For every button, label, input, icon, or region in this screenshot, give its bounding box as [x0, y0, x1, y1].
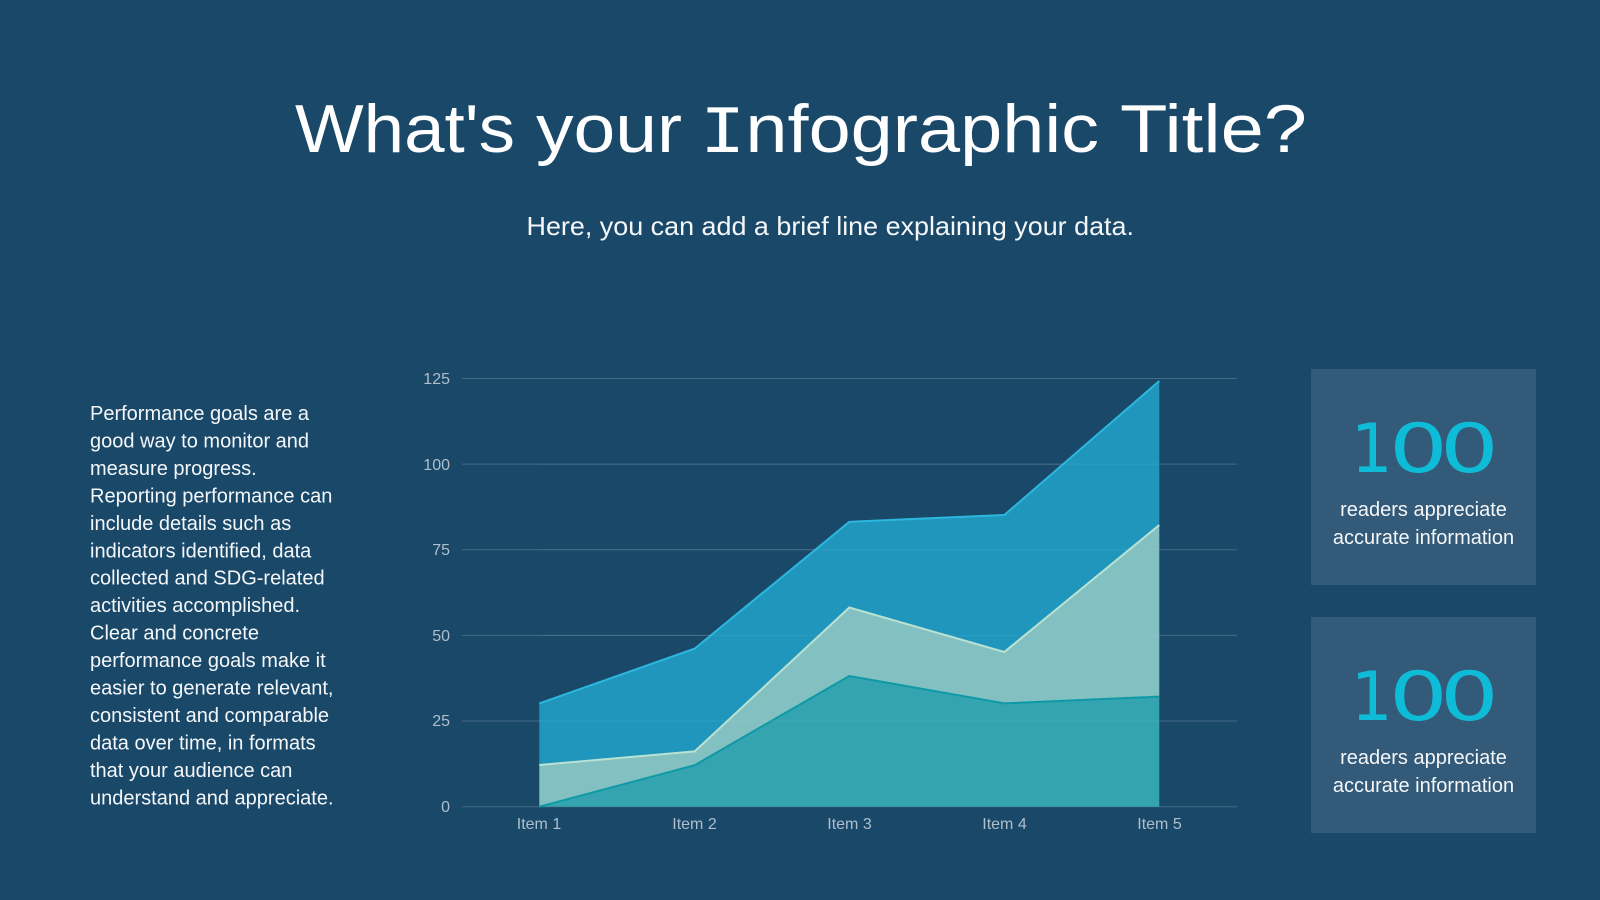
series: top band [539, 381, 1159, 765]
stat caption 1 [1333, 499, 1514, 549]
stat card 2 [1311, 617, 1536, 833]
stat number 2: 0 [1440, 658, 1499, 736]
text block: performance goals: Performance goals are a [90, 403, 310, 425]
title: your [536, 91, 682, 167]
stat caption 2: readers appreciate [1340, 747, 1507, 769]
text block: performance goals: easier to generate relevant, [90, 678, 334, 700]
y axis labels: 75 [432, 542, 450, 559]
y axis labels [423, 371, 450, 816]
y axis labels: 25 [432, 713, 450, 730]
series: middle band [539, 525, 1159, 807]
text block: performance goals: data over time, in formats [90, 732, 316, 754]
stat card 1 [1311, 369, 1536, 585]
x axis labels: Item 4 [982, 816, 1027, 833]
x axis labels [517, 816, 1182, 833]
text block: performance goals: understand and appreciate. [90, 787, 334, 809]
title: Infographic [700, 91, 1099, 173]
text block: performance goals: include details such as [90, 513, 291, 535]
y axis labels: 100 [423, 457, 450, 474]
title: What's [295, 91, 515, 167]
area chart [423, 371, 1237, 833]
x axis labels: Item 1 [517, 816, 561, 833]
stat caption 2 [1333, 747, 1514, 797]
text block: performance goals: indicators identified, data [90, 540, 312, 562]
x axis labels: Item 2 [672, 816, 717, 833]
stat caption 1: readers appreciate [1340, 499, 1507, 521]
stat caption 1: accurate information [1333, 527, 1514, 549]
y axis labels: 50 [432, 628, 450, 645]
stat caption 2: accurate information [1333, 775, 1514, 797]
text block: performance goals: performance goals make it [90, 650, 326, 672]
text block: performance goals: Reporting performance can [90, 485, 332, 507]
title: Title? [1120, 91, 1307, 167]
stat number 2 [1351, 658, 1499, 736]
stat number 1: 0 [1440, 410, 1499, 488]
stat number 2: 1 [1351, 658, 1393, 736]
subtitle: Here, you can add a brief line explaining your data. [526, 211, 1134, 241]
text block: performance goals: Clear and concrete [90, 623, 259, 645]
series: bottom band [539, 676, 1159, 807]
y axis labels: 0 [441, 799, 450, 816]
text block: performance goals: collected and SDG-related [90, 568, 325, 590]
text block: performance goals: good way to monitor and [90, 430, 309, 452]
x axis labels: Item 5 [1137, 816, 1182, 833]
text block: performance goals: that your audience can [90, 760, 292, 782]
text block: performance goals: consistent and comparable [90, 705, 329, 727]
stat number 1 [1351, 410, 1499, 488]
y axis labels: 125 [423, 371, 450, 388]
text block: performance goals: activities accomplished. [90, 595, 300, 617]
title [295, 91, 1307, 173]
text block: performance goals: measure progress. [90, 458, 257, 480]
stat number 2: 0 [1389, 658, 1448, 736]
x axis labels: Item 3 [827, 816, 872, 833]
stat number 1: 1 [1351, 410, 1393, 488]
stat number 1: 0 [1389, 410, 1448, 488]
